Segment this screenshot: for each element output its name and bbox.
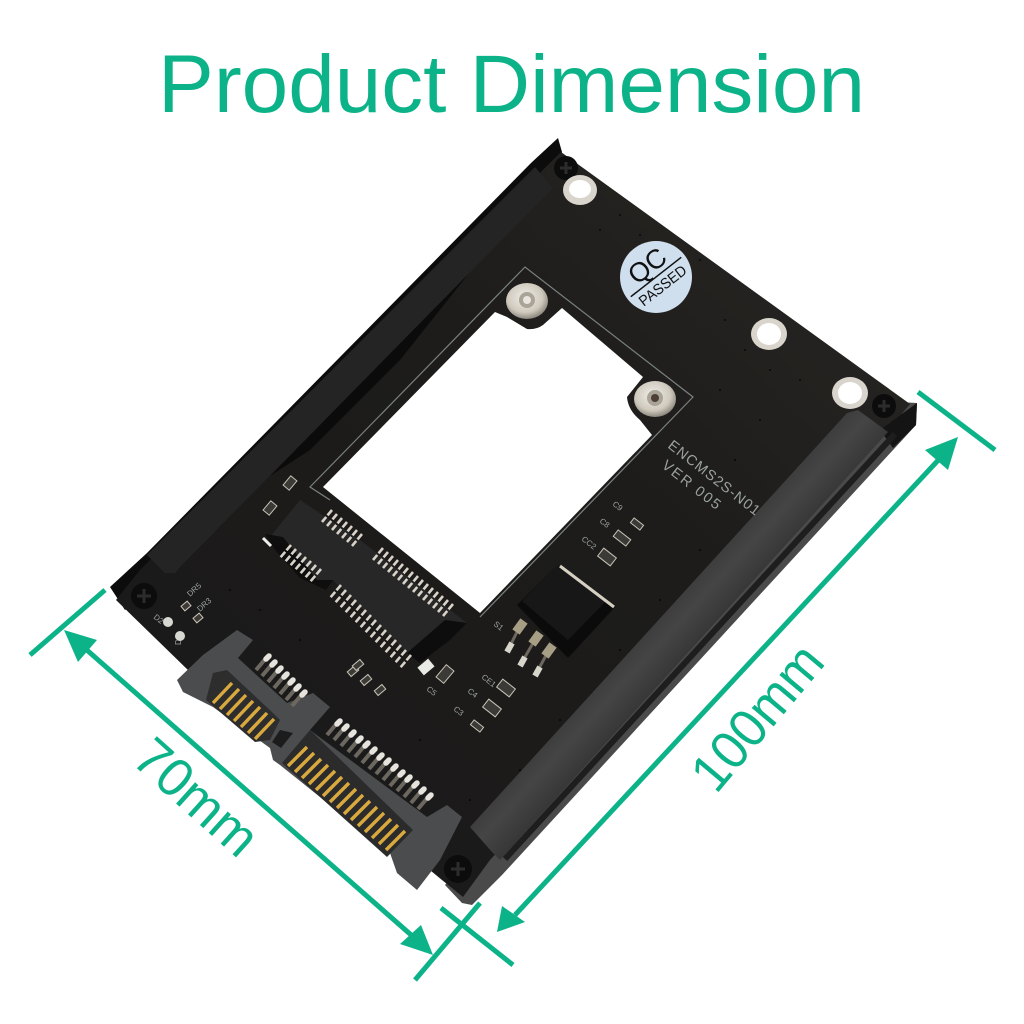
mounting holes bbox=[563, 175, 868, 409]
SATA silver solder pins bbox=[256, 657, 429, 809]
board silk text: C5 bbox=[425, 684, 439, 698]
board silk text: CC2 bbox=[580, 534, 598, 552]
board silk text: C4 bbox=[466, 686, 480, 700]
voltage regulator bbox=[507, 565, 615, 676]
QC passed sticker: PASSED bbox=[636, 262, 690, 310]
QC passed sticker bbox=[613, 234, 694, 313]
board silk text: C3 bbox=[452, 704, 466, 718]
dimension: 100mm bbox=[441, 392, 995, 965]
right bracket corner bbox=[880, 403, 917, 448]
board silk text: S1 bbox=[492, 619, 505, 633]
dimension: 100mm: 100mm bbox=[679, 632, 836, 803]
board silk text: DR5 bbox=[185, 581, 204, 598]
module window silk outline bbox=[310, 267, 693, 617]
right rail bbox=[470, 410, 888, 860]
QC passed sticker: QC bbox=[622, 242, 673, 290]
arrow: 100mm length bbox=[497, 437, 958, 932]
title: Product Dimension bbox=[158, 39, 865, 130]
product: SSD adapter board bbox=[110, 138, 917, 905]
board silk text bbox=[152, 438, 763, 718]
board silk text: CE1 bbox=[480, 672, 498, 689]
small components bbox=[163, 476, 644, 732]
standoffs bbox=[506, 283, 676, 417]
board silk text: VER 005 bbox=[659, 458, 724, 513]
dimension: 70mm bbox=[30, 590, 480, 980]
left rail shadow bbox=[270, 272, 470, 476]
solder dots bbox=[229, 214, 801, 801]
SATA gold pins bbox=[213, 683, 405, 850]
arrow: 70mm width bbox=[64, 630, 433, 955]
board silk text: D1 bbox=[174, 634, 183, 645]
pcb with module window bbox=[116, 152, 910, 897]
SATA connector bbox=[177, 630, 462, 890]
board silk text: DR3 bbox=[195, 596, 214, 613]
M.2 pins bbox=[280, 510, 453, 668]
left rail bbox=[147, 167, 553, 573]
screws bbox=[131, 156, 896, 883]
right side bracket bbox=[445, 400, 917, 905]
dimension: 70mm: 70mm bbox=[122, 726, 271, 869]
board silk text: C9 bbox=[611, 499, 625, 513]
board silk text: C8 bbox=[598, 516, 612, 530]
right rail dark edge bbox=[505, 434, 895, 859]
M.2 slot connector bbox=[263, 500, 467, 675]
board silk text: ENCMS2S-N01 bbox=[665, 438, 763, 519]
board silk text: D2 bbox=[152, 612, 166, 626]
left side bracket bbox=[110, 138, 562, 610]
